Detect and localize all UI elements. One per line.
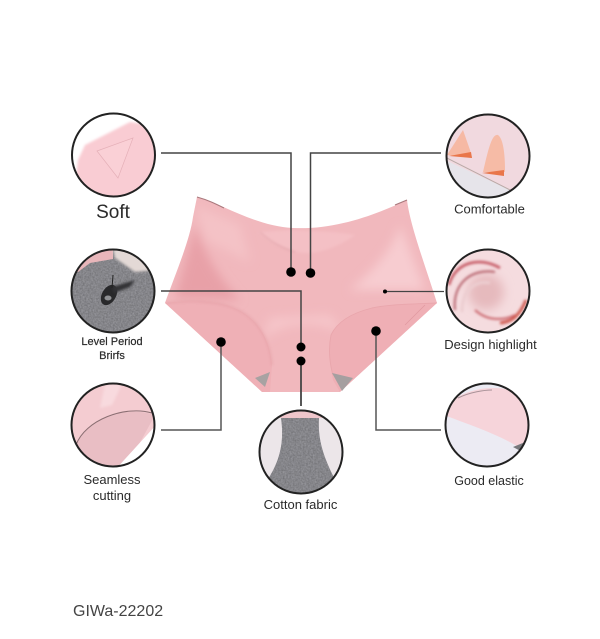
- callout: design highlight: Design highlight: [444, 337, 537, 352]
- photo: elastic edge: [446, 384, 528, 466]
- callout: cotton fabric: Cotton fabric: [264, 497, 338, 512]
- callout: comfortable: Comfortable: [454, 202, 525, 216]
- waist edge highlights: [197, 197, 224, 208]
- callout: cotton fabric: [258, 356, 344, 512]
- back panel fold: [258, 230, 355, 253]
- photo: soft fabric: [76, 121, 154, 196]
- callout: level period briefs: Level Period: [81, 336, 143, 348]
- callout: good elastic: Good elastic: [454, 474, 524, 488]
- photo: folded fabric: [448, 116, 528, 196]
- callout: seamless cutting: [70, 337, 226, 503]
- right leg panel: [330, 303, 437, 392]
- photo: gusset fabric: [260, 412, 342, 492]
- callout: seamless cutting: Seamless: [83, 472, 141, 487]
- product code: GIWa-22202: [73, 603, 163, 620]
- garment illustration: [165, 197, 437, 392]
- photo: swirl fabric: [448, 250, 528, 332]
- gusset left: [255, 372, 270, 387]
- callout: design highlight: [383, 248, 537, 352]
- left leg panel: [165, 301, 272, 392]
- callout: good elastic: [371, 326, 530, 488]
- callout: seamless cutting: cutting: [93, 488, 131, 503]
- callout: comfortable: [306, 113, 531, 278]
- callout: level period briefs: [70, 248, 306, 362]
- garment shading: [165, 205, 437, 392]
- photo: seamless edge: [72, 384, 154, 466]
- callout: level period briefs: Brirfs: [99, 350, 125, 362]
- photo: waterproof fabric: [72, 250, 154, 332]
- callout: soft: Soft: [96, 202, 131, 223]
- gusset right: [332, 373, 353, 391]
- callout: soft: [70, 112, 296, 277]
